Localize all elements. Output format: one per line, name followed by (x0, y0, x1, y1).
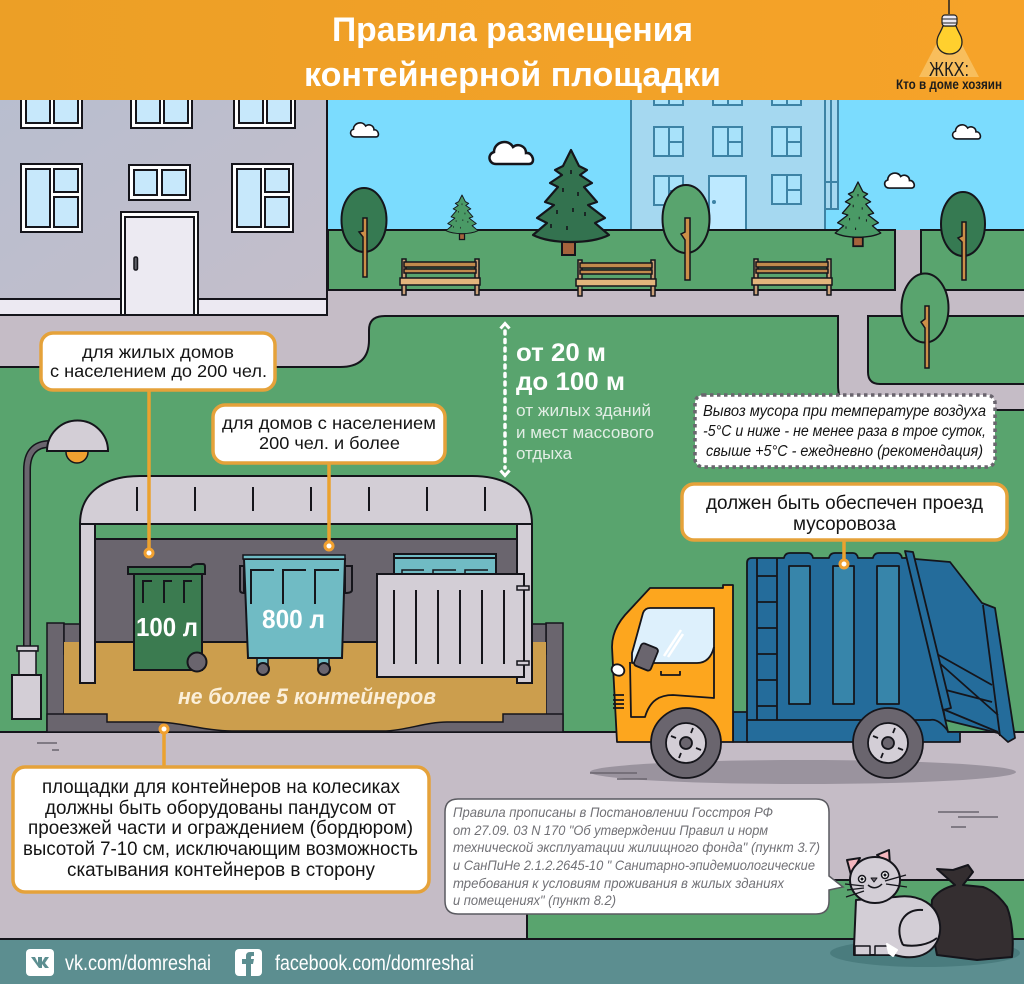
callout: ramp requirement: высотой 7-10 см, исключающим возможность (23, 838, 418, 860)
callout: 200 residents and more: 200 чел. и более (259, 433, 400, 453)
cat and bag shadow (830, 939, 1020, 967)
logo text (896, 59, 1002, 92)
footer: vk link (26, 949, 211, 976)
title: контейнерной площадки (304, 56, 721, 94)
pointer: small bin (145, 390, 153, 557)
truck shadow (590, 760, 1016, 784)
cat (845, 850, 940, 957)
road marks (37, 743, 998, 827)
round trees (342, 185, 985, 368)
footer: facebook link (235, 949, 474, 976)
header band (0, 0, 1024, 100)
distance text: от жилых зданий (516, 402, 651, 420)
footer: vk link: vk.com/domreshai (65, 952, 211, 975)
callout: 200 residents and more: для домов с населением (222, 413, 436, 433)
callout: up to 200 residents: с населением до 200 чел. (50, 361, 267, 381)
distance text: отдыха (516, 445, 573, 463)
callout: truck access: мусоровоза (793, 514, 896, 535)
container platform (47, 623, 563, 732)
footer: facebook link: facebook.com/domreshai (275, 952, 474, 975)
callout: ramp requirement: скатывания контейнеров в сторону (67, 859, 375, 881)
garbage bag (931, 865, 1013, 960)
callout: truck access: должен быть обеспечен проезд (706, 493, 983, 514)
logo: light bulb (919, 0, 979, 77)
callout: 200 residents and more (213, 405, 445, 463)
callout: temperature schedule: Вывоз мусора при температуре воздуха (703, 403, 986, 420)
logo text: ЖКХ: (929, 59, 969, 81)
callout: ramp requirement (13, 767, 429, 892)
distance text: до 100 м (516, 368, 625, 396)
callout: temperature schedule: -5°С и ниже - не менее раза в трое суток, (703, 423, 986, 440)
enclosed container with gate (377, 554, 529, 677)
road base (0, 230, 1024, 940)
near building (0, 80, 327, 315)
title: Правила размещения (332, 11, 693, 49)
sky background (328, 100, 1024, 235)
footer band (0, 939, 1024, 984)
speech bubble: legal references: от 27.09. 03 N 170 "Об утверждении Правил и норм (453, 822, 768, 838)
speech bubble: legal references: требования к условиям проживания в жилых зданиях (453, 875, 785, 891)
green bin 100 l (128, 564, 206, 672)
right lawn (868, 316, 1024, 384)
callout: ramp requirement: площадки для контейнеров на колесиках (42, 776, 400, 798)
street lamp (12, 421, 108, 719)
main lawn (0, 316, 1024, 732)
shelter (80, 476, 532, 683)
speech bubble: legal references: и помещениях" (пункт 8.2) (453, 892, 616, 908)
speech bubble: legal references: Правила прописаны в Постановлении Госстроя РФ (453, 804, 773, 820)
fir trees (446, 150, 881, 255)
pointer: truck (840, 540, 848, 568)
distance text (516, 339, 654, 463)
clouds (351, 123, 980, 188)
callout: temperature schedule: свыше +5°С - ежедневно (рекомендация) (706, 443, 983, 460)
title (304, 11, 721, 94)
garbage truck (610, 551, 1015, 778)
bottom right lawn (527, 880, 1024, 940)
callout: up to 200 residents (41, 333, 275, 390)
teal bin 800 l: 800 л (262, 604, 325, 634)
speech bubble: legal references: технической эксплуатации жилищного фонда" (пункт 3.7) (453, 839, 820, 855)
speech bubble: legal references: и СанПиНе 2.1.2.2645-10 " Санитарно-эпидемиологические (453, 857, 815, 873)
distance arrow (500, 324, 510, 476)
shelter back wall (95, 539, 517, 642)
upper lawn (328, 230, 1024, 290)
teal bin 800 l (240, 555, 352, 675)
distance text: и мест массового (516, 424, 654, 442)
logo text: Кто в доме хозяин (896, 77, 1002, 92)
benches (400, 259, 832, 296)
speech bubble: legal references (445, 799, 843, 914)
callout: temperature schedule (695, 395, 995, 467)
distance text: от 20 м (516, 339, 606, 367)
pointer: ramp (160, 725, 168, 768)
green bin 100 l: 100 л (136, 612, 198, 642)
callout: ramp requirement: проезжей части и ограждением (бордюром) (28, 817, 413, 839)
pointer: large bin (325, 462, 333, 550)
callout: up to 200 residents: для жилых домов (82, 342, 234, 362)
label: no more than 5 containers: не более 5 контейнеров (178, 684, 436, 709)
far apartment building (631, 76, 838, 230)
callout: truck access (682, 484, 1007, 540)
callout: ramp requirement: должны быть оборудованы пандусом от (45, 797, 396, 819)
